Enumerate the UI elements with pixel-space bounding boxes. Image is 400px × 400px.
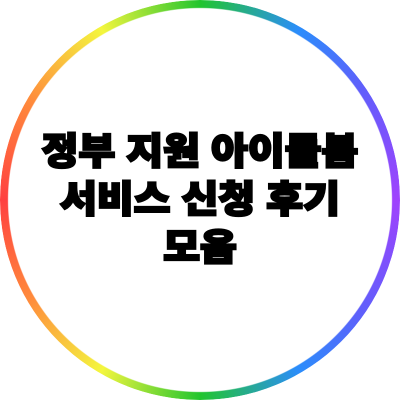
title: 서비스 신청 후기 [60,180,340,220]
title [40,132,358,268]
title: 정부 지원 아이돌봄 [42,132,358,172]
title: 모음 [163,228,237,268]
